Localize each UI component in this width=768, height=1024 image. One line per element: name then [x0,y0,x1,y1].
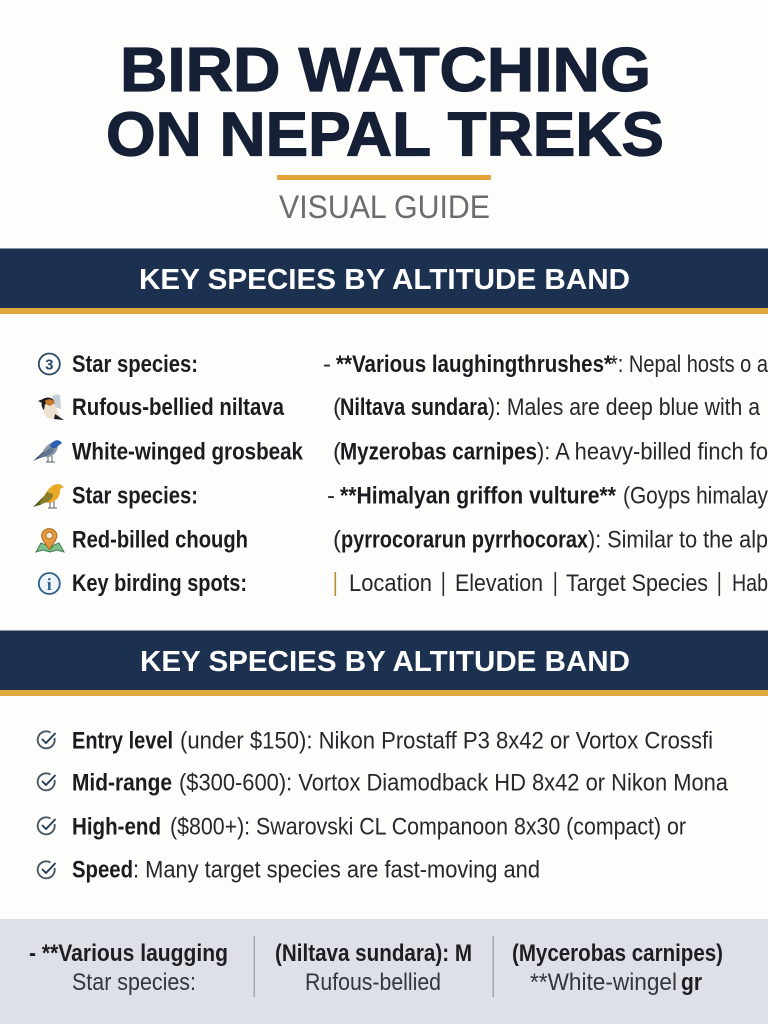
row: high-end: High-end [72,813,161,840]
row: white-winged grosbeak: Myzerobas carnipes [340,438,537,466]
row: rufous-bellied niltava [72,394,761,421]
row: star species griffon [72,482,768,510]
footer column 1: - **Various laugging [29,940,228,967]
footer column 3: (Mycerobas carnipes) [512,940,723,967]
subtitle: VISUAL GUIDE [279,189,490,225]
row: star species griffon: Star species: [72,482,198,510]
icon: map pin [36,529,64,552]
row: star species griffon: **Himalyan griffon vulture** [340,482,617,510]
row: white-winged grosbeak: ( [333,438,341,466]
row: red-billed chough [72,526,768,554]
row: key birding spots: Elevation [455,570,543,597]
icon: niltava bird [38,394,64,420]
row: entry level: Entry level [72,727,173,754]
title: ON NEPAL TREKS [106,100,664,170]
row: rufous-bellied niltava: Rufous-bellied niltava [72,394,285,421]
row: white-winged grosbeak [72,438,768,466]
icon: info [39,573,60,594]
row: red-billed chough: ( [333,526,341,554]
row: key birding spots: Key birding spots: [72,570,247,597]
footer column 3: **White-wingel [530,969,677,996]
footer column 2 [275,940,472,996]
section banner: species [0,248,768,314]
row: high-end: ($800+): Swarovski CL Companoon 8x30 (compact) or [170,813,686,840]
row: key birding spots: Location [349,570,432,597]
section banner: gear: KEY SPECIES BY ALTITUDE BAND [140,646,630,678]
row: red-billed chough: pyrrocorarun pyrrhocorax [341,526,589,554]
footer column 3 [512,940,723,996]
row: rufous-bellied niltava: Niltava sundara [340,394,489,421]
icon: info: i [47,575,52,594]
footer strip [0,919,768,1024]
species list [33,351,768,597]
row: entry level: (under $150): Nikon Prostaff P3 8x42 or Vortox Crossfi [180,727,713,754]
row: white-winged grosbeak: White-winged grosbeak [72,438,304,466]
footer column 1 [29,940,228,996]
row: key birding spots: Target Species [566,570,708,597]
icon: number three: 3 [45,356,53,374]
row: key birding spots [72,570,768,597]
row: rufous-bellied niltava: ( [333,394,341,421]
icon: yellow bird [33,484,64,508]
row: speed: : Many target species are fast-moving and [133,857,540,884]
row: red-billed chough: Red-billed chough [72,526,248,554]
gear checklist [38,727,729,884]
section banner: species: KEY SPECIES BY ALTITUDE BAND [139,264,630,296]
row: star species: Star species: [72,351,198,378]
icon: number three [39,354,60,374]
footer column 3: gr [681,969,702,996]
icon: blue grosbeak [33,440,62,462]
title accent rule [277,175,491,180]
row: star species: - [323,351,331,378]
row: mid-range: ($300-600): Vortox Diamodback HD 8x42 or Nikon Mona [179,770,729,797]
row: star species griffon: - [327,482,335,510]
row: speed: Speed [72,857,133,884]
title: BIRD WATCHING [120,36,651,105]
footer column 2: Rufous-bellied [305,969,441,996]
section banner: gear [0,630,768,696]
row: star species: **Various laughingthrushes* [336,351,613,378]
row: star species [72,351,768,378]
footer column 2: (Niltava sundara): M [275,940,472,967]
title [106,36,664,170]
row: mid-range: Mid-range [72,770,172,797]
footer column 1: Star species: [72,969,196,996]
